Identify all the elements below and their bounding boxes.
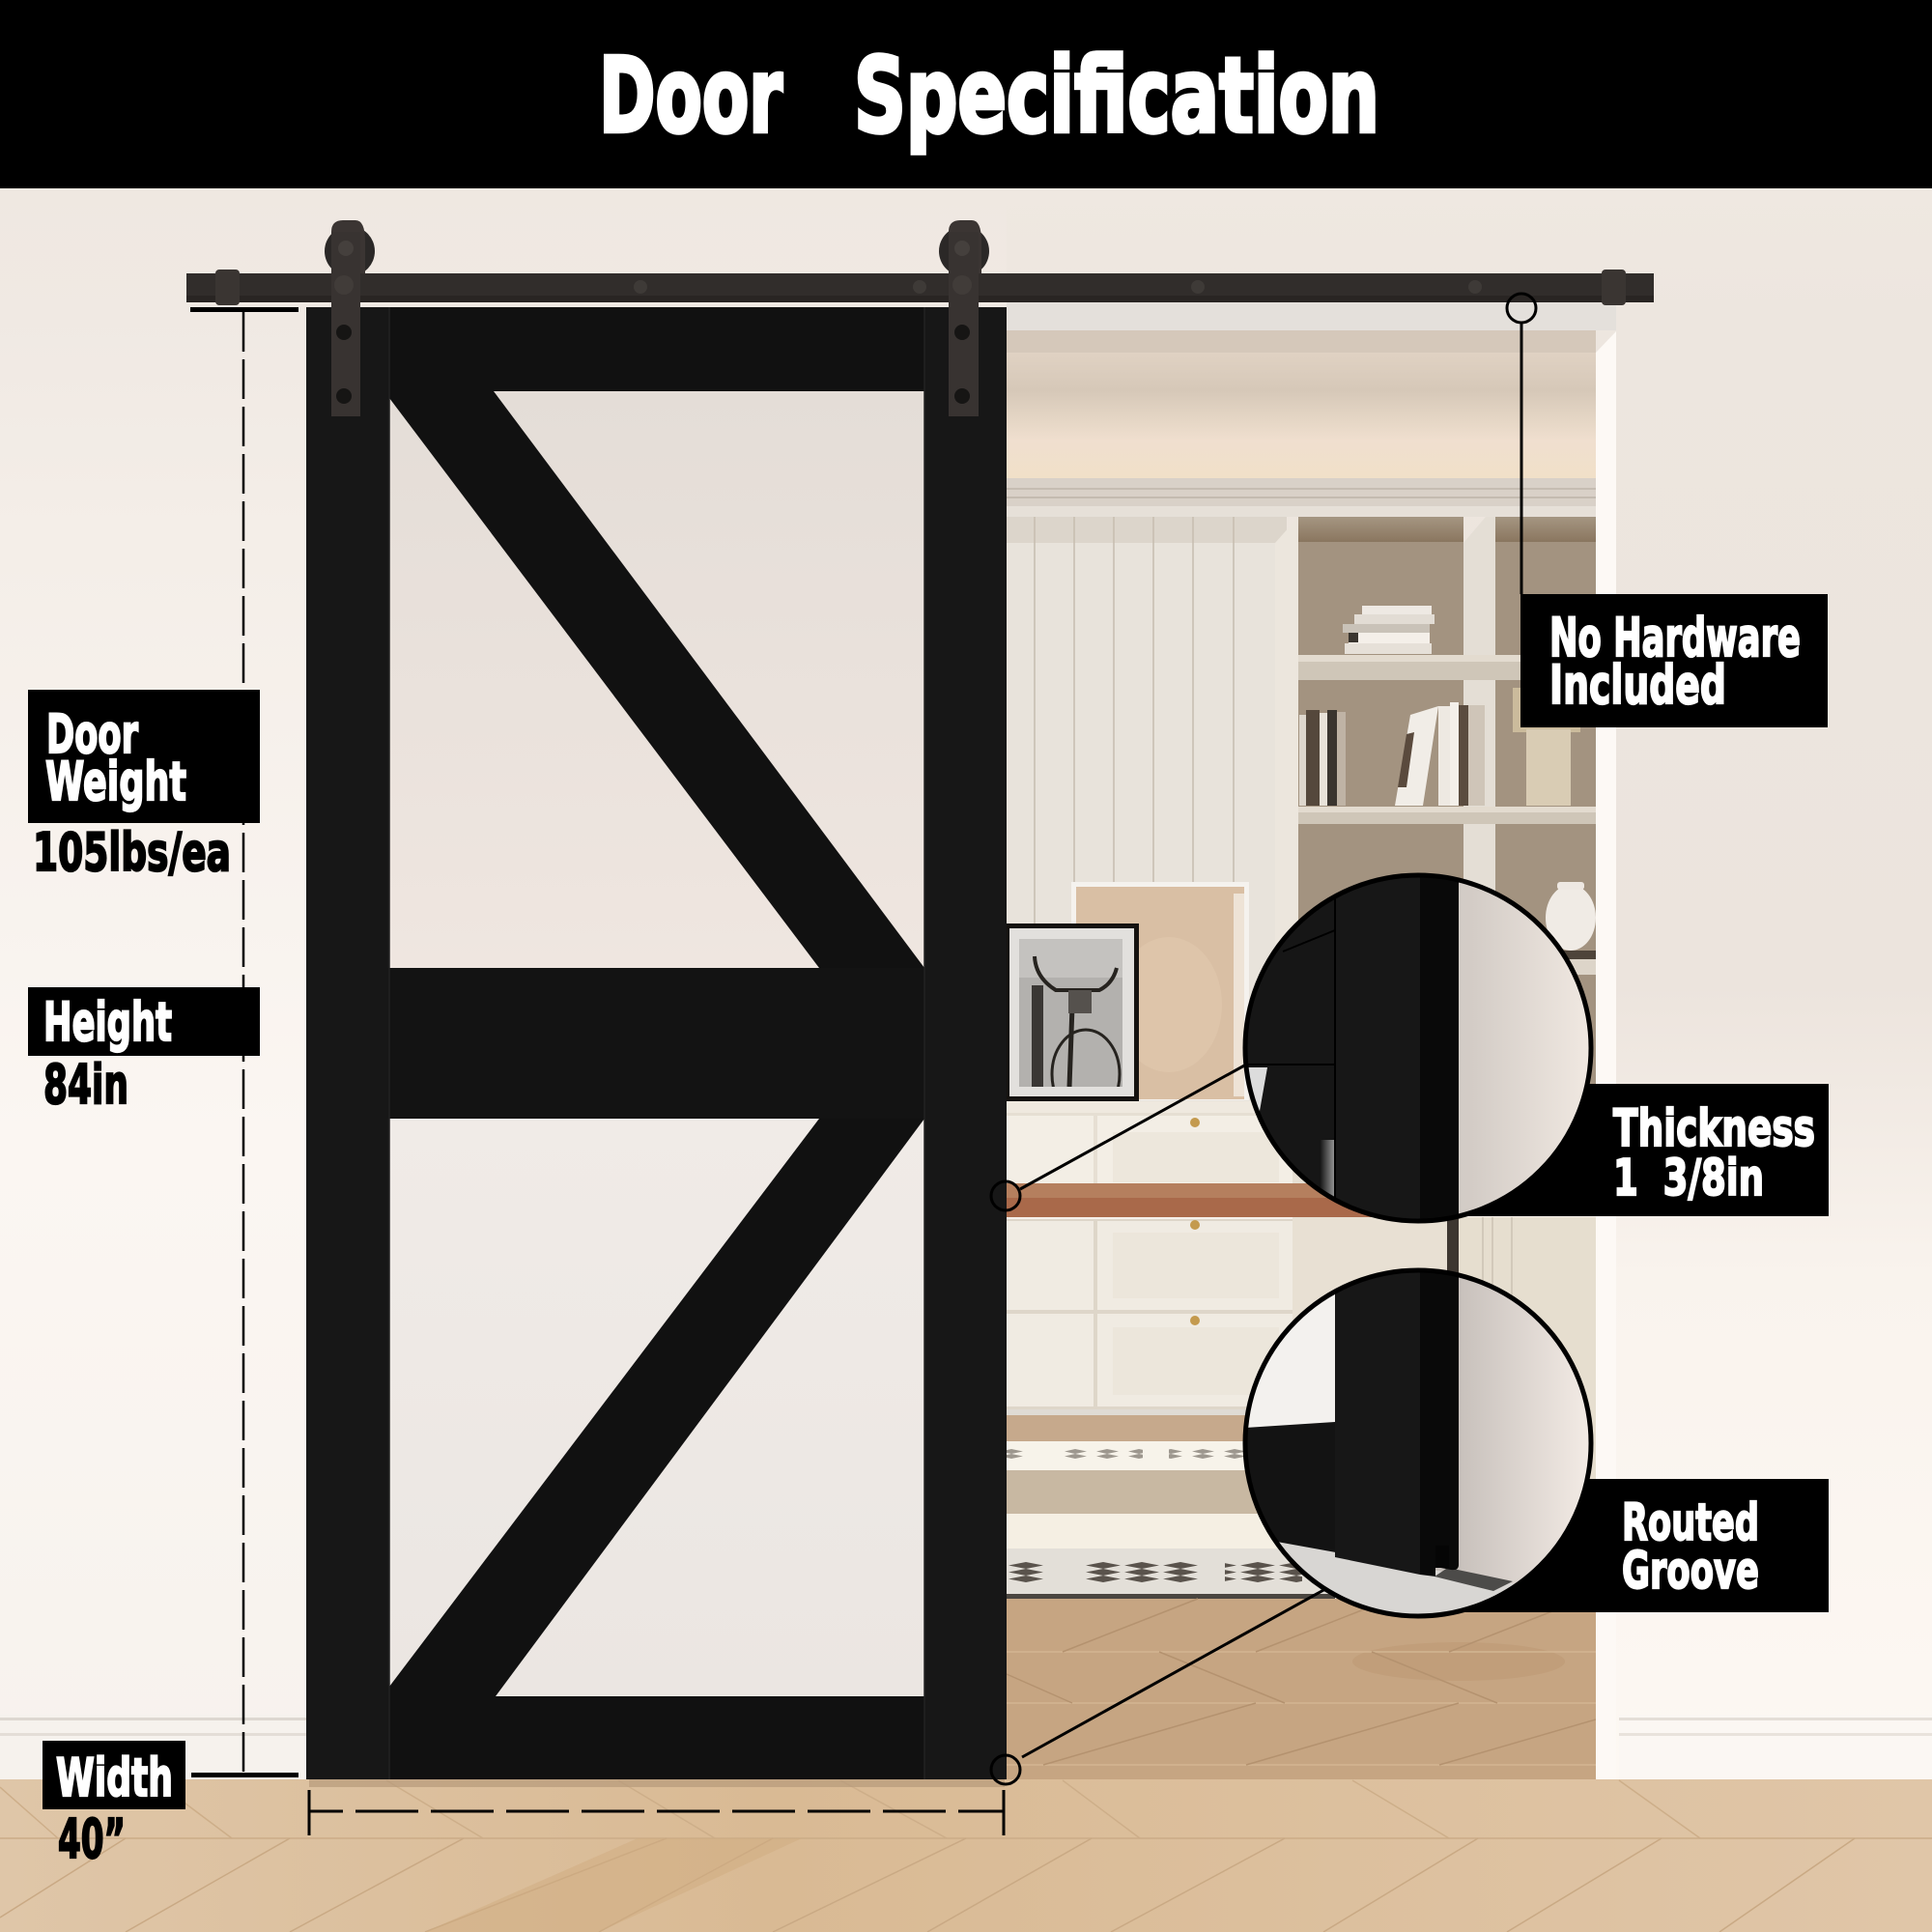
sculpture lamp [1513, 688, 1580, 806]
upright books [1299, 702, 1485, 806]
title [599, 37, 1379, 156]
ceiling [1007, 353, 1596, 479]
bicycle photo frame [1007, 923, 1139, 1101]
routed groove label [1453, 1479, 1829, 1612]
panelled wall [1007, 517, 1287, 1106]
doorway interior room [1005, 302, 1616, 1779]
callout: no hardware included [1507, 294, 1828, 727]
right hanger strap [939, 220, 989, 416]
magnified circle: door bottom groove [1245, 1270, 1604, 1623]
rail stop left [215, 270, 240, 305]
thickness label: 1 3/8in [1613, 1150, 1764, 1208]
stacked books [1343, 606, 1435, 654]
top rail [389, 307, 924, 391]
rail stop right [1602, 270, 1626, 305]
value: width: 40” [58, 1808, 126, 1871]
label: height: Height [43, 991, 172, 1053]
label: door weight: Door [46, 703, 138, 765]
label: door weight [28, 690, 260, 823]
label: door weight: Weight [45, 751, 186, 812]
routed groove label: Groove [1622, 1542, 1759, 1601]
crown moulding [1007, 478, 1596, 517]
bookshelf [1275, 517, 1596, 1106]
lower diagonal brace [389, 1119, 924, 1696]
left hanger strap [325, 220, 375, 416]
height dimension line [190, 307, 298, 1777]
back wall panels [1293, 1217, 1596, 1604]
callout: thickness [991, 875, 1829, 1223]
title: Door [599, 37, 782, 156]
callout: routed groove [991, 1270, 1829, 1784]
wall background left [0, 188, 1007, 1782]
callout: no hardware included: No Hardware [1549, 607, 1801, 668]
beige art print [1071, 882, 1249, 1100]
room floor [0, 1779, 1932, 1932]
title banner [0, 0, 1932, 188]
vase [1546, 882, 1596, 959]
doorway header [1007, 302, 1616, 353]
baseboard [0, 1715, 1932, 1780]
barn door [306, 307, 1007, 1779]
value: door weight: 105lbs/ea [33, 822, 231, 883]
thickness label [1453, 1084, 1829, 1216]
magnified circle: door edge [1245, 875, 1593, 1223]
upper diagonal brace [389, 391, 924, 968]
lower glass panel [389, 1119, 924, 1696]
bottom rail [389, 1696, 924, 1779]
label: width: Width [56, 1747, 173, 1808]
wooden counter [1007, 1183, 1393, 1217]
thickness label: Thickness [1613, 1099, 1815, 1158]
interior wood floor [1007, 1599, 1596, 1779]
width dimension line [307, 1790, 1005, 1835]
value: height: 84in [43, 1054, 128, 1117]
routed groove label: Routed [1622, 1493, 1759, 1552]
routed groove pointer [991, 1589, 1325, 1784]
label: width [43, 1741, 185, 1809]
callout: no hardware included: Included [1549, 654, 1726, 716]
upper glass panel [389, 391, 924, 968]
title: Specification [854, 37, 1379, 156]
door frame stiles and rails [306, 307, 1007, 1779]
barn door track rail [186, 270, 1654, 305]
cabinets [1007, 1101, 1451, 1409]
rug [1007, 1441, 1461, 1599]
thickness pointer [991, 1065, 1246, 1210]
icon: bicycle [1032, 956, 1121, 1087]
doorway trim right [1596, 331, 1616, 1779]
middle rail [389, 968, 924, 1119]
wall background right [1007, 188, 1932, 1782]
back room floor [1007, 1409, 1459, 1441]
